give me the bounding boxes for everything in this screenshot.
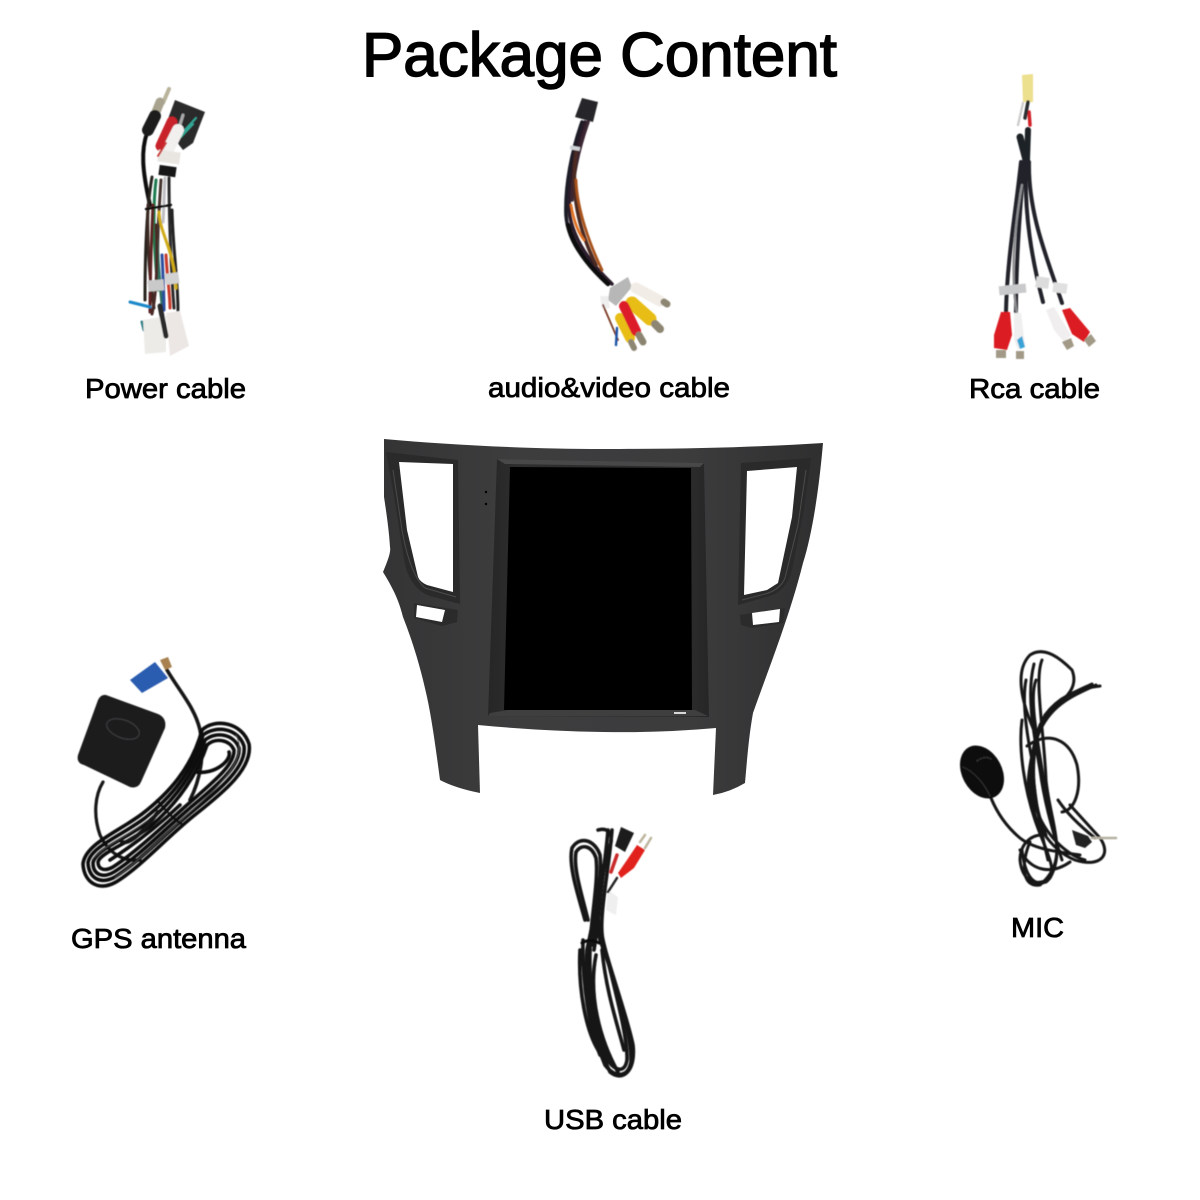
faceplate: [383, 439, 823, 795]
left window: [399, 462, 453, 592]
right window frame: [738, 458, 811, 605]
panel: head unit: [383, 439, 823, 795]
left window frame: [386, 452, 460, 604]
sensor dots: [485, 491, 487, 493]
label: usb cable: USB cable: [544, 1104, 682, 1135]
screen: [504, 467, 692, 710]
label: rca cable: Rca cable: [969, 373, 1100, 404]
icon: microphone: [951, 652, 1116, 885]
icon: usb cable: [571, 827, 651, 1076]
brand mark: [674, 712, 686, 714]
label: audio and video cable: audio&video cable: [488, 372, 730, 403]
right vent slot: [740, 608, 785, 628]
screen bezel: [488, 459, 709, 717]
left vent slot: [414, 603, 458, 626]
title: Package Content: [362, 21, 837, 90]
icon: gps antenna: [78, 657, 249, 886]
icon: rca cable: [994, 74, 1096, 359]
right window: [744, 467, 797, 595]
icon: power cable: [130, 89, 205, 356]
label: power cable: Power cable: [85, 373, 246, 404]
icon: audio and video cable: [566, 98, 667, 348]
label: microphone: MIC: [1011, 912, 1064, 943]
label: gps antenna: GPS antenna: [71, 923, 246, 954]
